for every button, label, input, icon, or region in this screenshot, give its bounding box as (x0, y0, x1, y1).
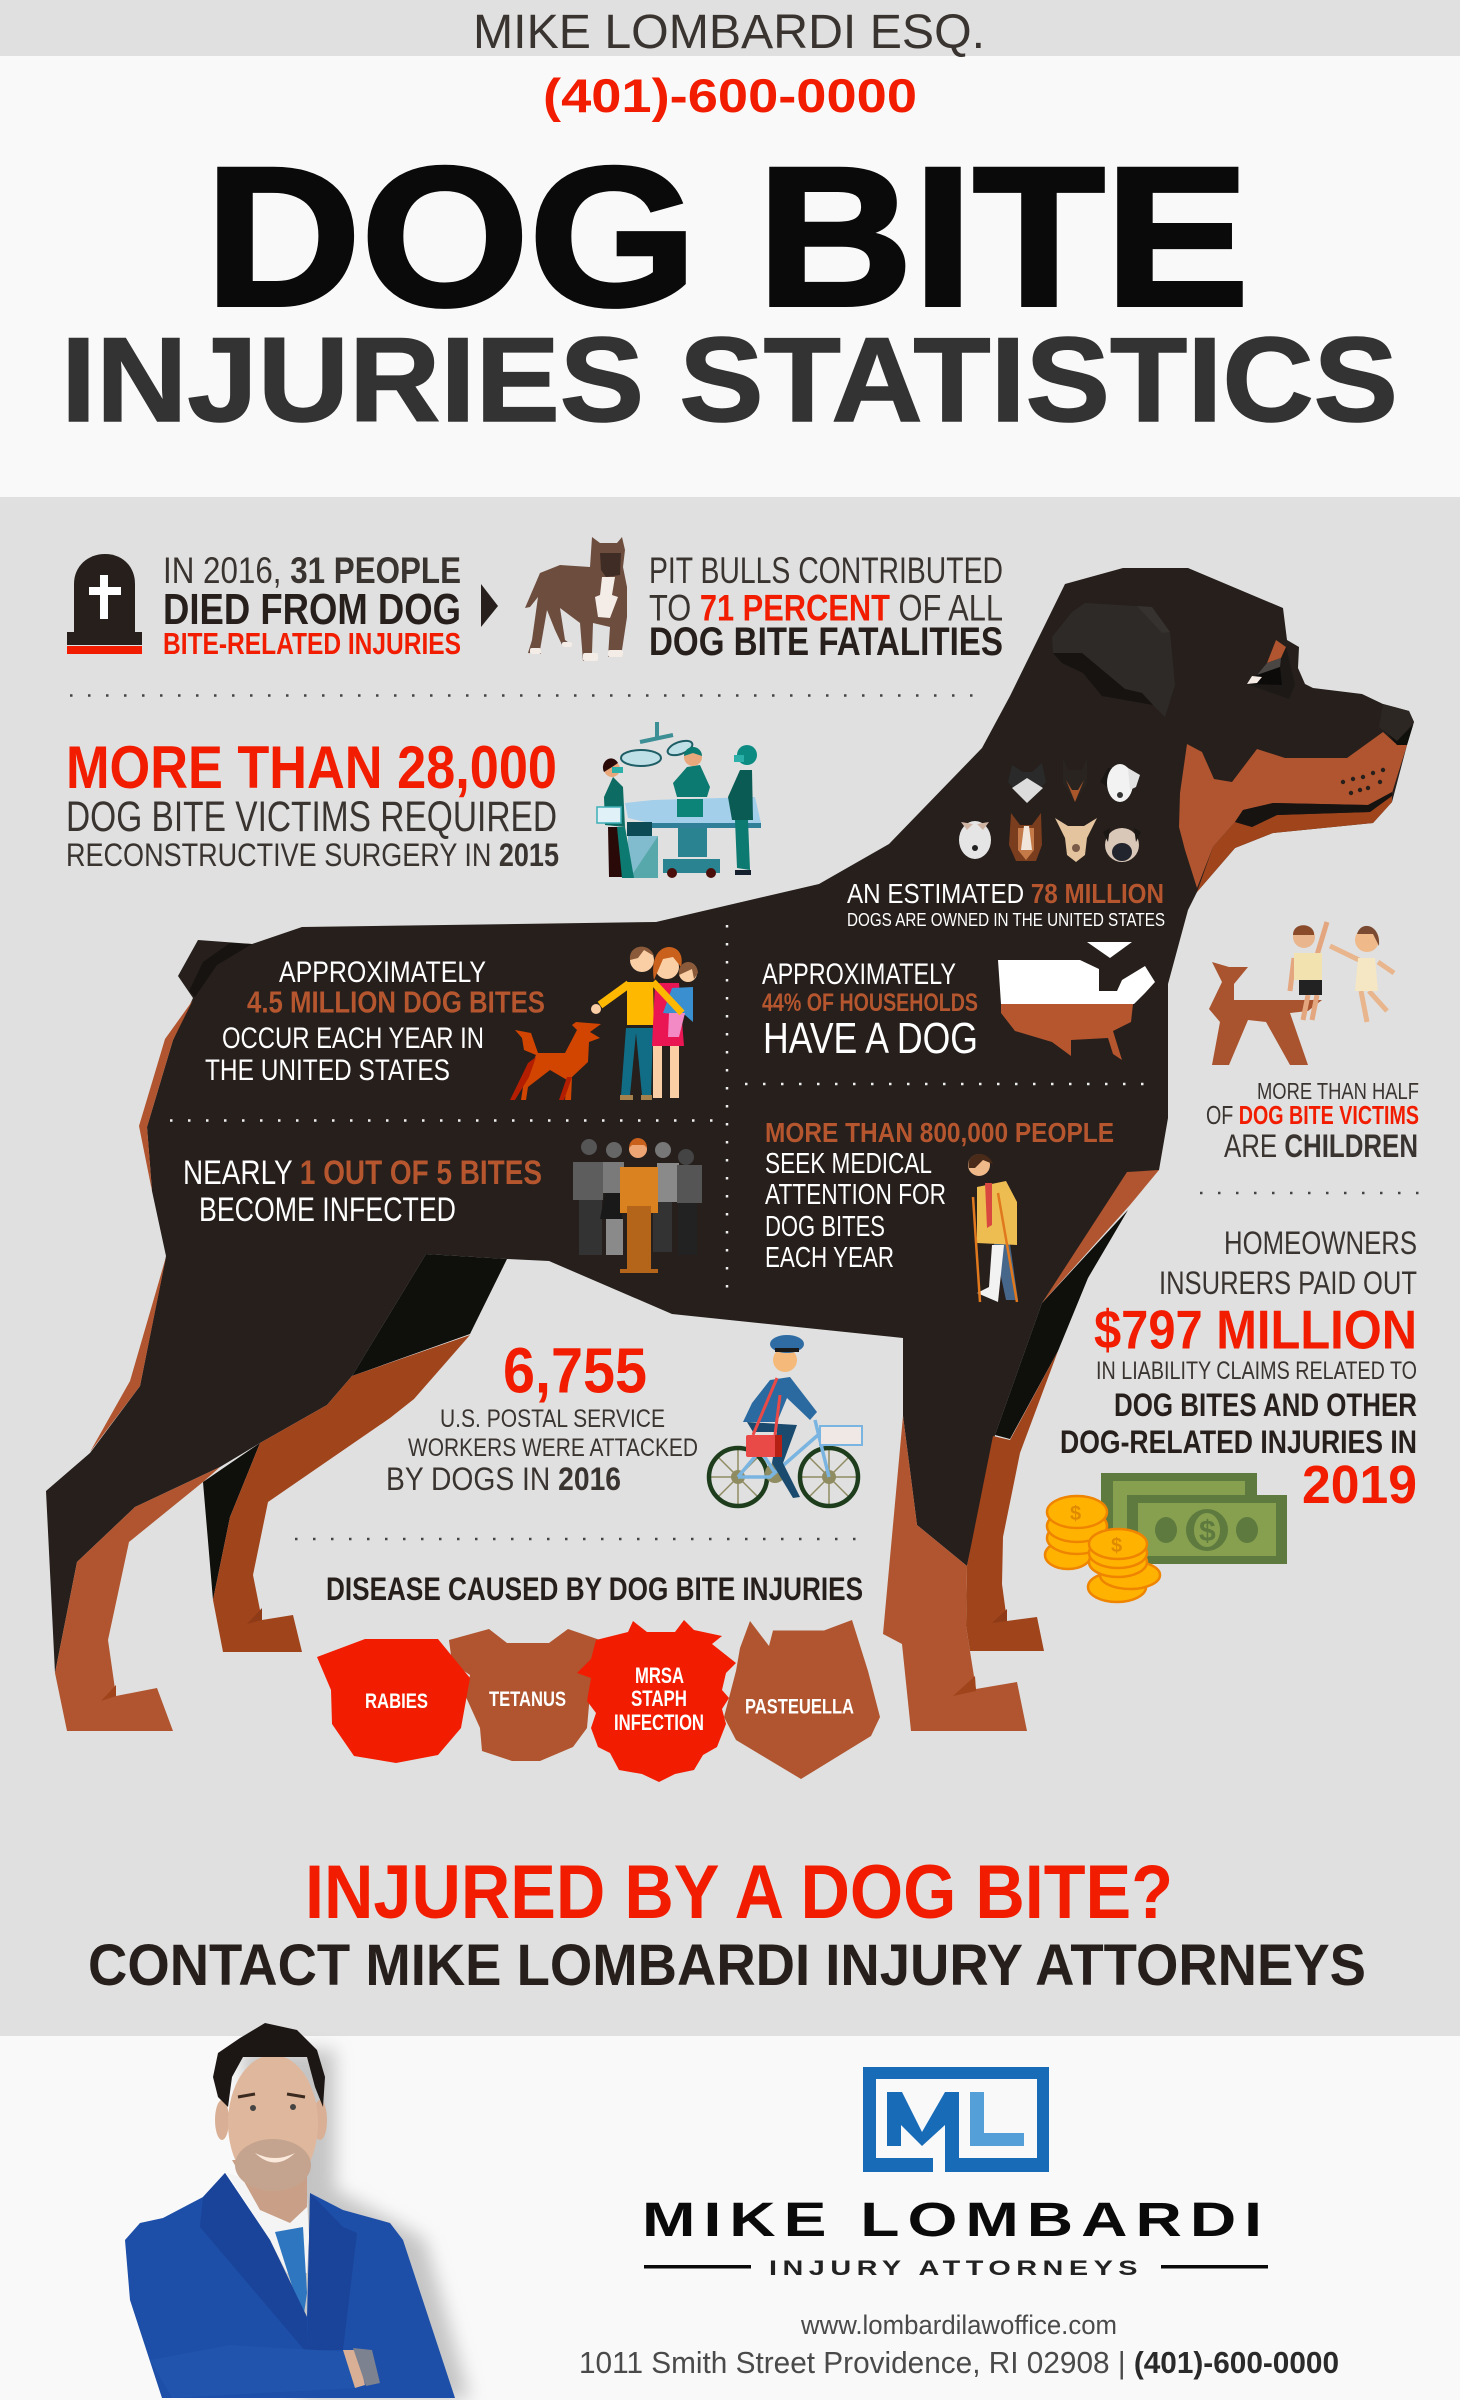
call to action: CONTACT MIKE LOMBARDI INJURY ATTORNEYS (88, 1933, 1366, 1998)
text: homeowners insurers: 2019 (1302, 1455, 1417, 1515)
title: DOG BITE (205, 126, 1249, 347)
text: 78 million dogs: DOGS ARE OWNED IN THE UNITED STATES (847, 910, 1165, 930)
text: half are children: MORE THAN HALF (1257, 1078, 1419, 1104)
text: reconstructive surgery: RECONSTRUCTIVE SURGERY IN 2015 (66, 837, 559, 873)
text: 44% of households: 44% OF HOUSEHOLDS (762, 989, 978, 1017)
icon: money and coins: $ (1199, 1515, 1216, 1548)
text: postal workers: 6,755 (503, 1334, 647, 1406)
disease: MRSA staph infection head: MRSA (635, 1663, 684, 1688)
logo: firm wordmark: MIKE LOMBARDI (642, 2194, 1270, 2247)
icon: muzzle whisker dots (1341, 768, 1385, 795)
disease: tetanus head (449, 1629, 600, 1761)
arrow (481, 584, 498, 627)
text: half are children (1206, 1078, 1419, 1164)
disease: rabies head (317, 1639, 470, 1763)
text: homeowners insurers (1060, 1225, 1417, 1515)
text: postal workers (386, 1334, 698, 1497)
text: homeowners insurers: HOMEOWNERS (1224, 1225, 1417, 1261)
text: 4.5 million dog bites: THE UNITED STATES (205, 1054, 450, 1087)
disease: MRSA staph infection head (577, 1620, 736, 1782)
dotted divider lines (70, 696, 1420, 1539)
icon: man on crutches (968, 1154, 1018, 1302)
text: 1 out of 5 bites: BECOME INFECTED (199, 1191, 456, 1229)
text: 78 million dogs (847, 878, 1165, 930)
text: reconstructive surgery (66, 734, 559, 873)
text: half are children: ARE CHILDREN (1224, 1128, 1418, 1164)
text: 4.5 million dog bites: OCCUR EACH YEAR IN (222, 1022, 484, 1055)
disease: rabies head: RABIES (365, 1690, 428, 1713)
text: homeowners insurers: $797 MILLION (1094, 1298, 1417, 1360)
text: 800,000 people: ATTENTION FOR (765, 1179, 946, 1211)
text: 4.5 million dog bites: 4.5 MILLION DOG BITES (247, 984, 545, 1020)
text: postal workers: BY DOGS IN 2016 (386, 1461, 621, 1497)
text: people died (163, 550, 461, 661)
disease: MRSA staph infection head: INFECTION (614, 1710, 704, 1735)
text: 800,000 people: SEEK MEDICAL (765, 1148, 932, 1180)
icon: money and coins: $ (1111, 1535, 1122, 1557)
title: INJURIES STATISTICS (61, 313, 1398, 447)
attorney portrait (125, 2023, 470, 2399)
footer contact details: 1011 Smith Street Providence, RI 02908 | (401)-600-0000 (579, 2345, 1339, 2380)
call to action (88, 1850, 1366, 1998)
dog silhouette (46, 568, 1414, 1731)
icon: money and coins (1045, 1473, 1287, 1602)
icon: tombstone (67, 554, 142, 654)
text: 4.5 million dog bites: APPROXIMATELY (279, 956, 486, 989)
header: firm name and phone (473, 6, 985, 122)
footer contact details (579, 2310, 1339, 2380)
text: people died: IN 2016, 31 PEOPLE (163, 550, 461, 591)
disease: pasteuella head: PASTEUELLA (745, 1696, 854, 1718)
icon: dog ear (1052, 603, 1175, 717)
title (61, 126, 1398, 447)
icon: dog nose (1379, 704, 1414, 745)
icon: dog eye (1247, 640, 1295, 699)
text: pit bulls: PIT BULLS CONTRIBUTED (649, 550, 1003, 591)
icon: crowd with one highlighted person (573, 1138, 702, 1273)
header: firm name and phone: (401)-600-0000 (543, 69, 917, 122)
icon: US map (998, 942, 1155, 1060)
text: 1 out of 5 bites (183, 1154, 542, 1229)
icon: surgery team (597, 722, 761, 878)
text: 44% of households: HAVE A DOG (763, 1014, 978, 1063)
logo: firm wordmark: INJURY ATTORNEYS (769, 2257, 1143, 2280)
logo: firm wordmark (642, 2194, 1270, 2280)
text: pit bulls (649, 550, 1003, 664)
text: postal workers: WORKERS WERE ATTACKED (408, 1434, 698, 1462)
text: 44% of households (762, 958, 978, 1063)
text: pit bulls: TO 71 PERCENT OF ALL (649, 588, 1003, 628)
icon: postal worker on bicycle (709, 1335, 862, 1506)
text: reconstructive surgery: DOG BITE VICTIMS REQUIRED (66, 793, 557, 841)
text: 1 out of 5 bites: NEARLY 1 OUT OF 5 BITES (183, 1154, 542, 1192)
text: people died: DIED FROM DOG (163, 585, 461, 634)
header: firm name and phone: MIKE LOMBARDI ESQ. (473, 6, 985, 59)
text: reconstructive surgery: MORE THAN 28,000 (66, 734, 557, 801)
disease: MRSA staph infection head: STAPH (631, 1686, 687, 1711)
icon: pit bull (525, 537, 627, 661)
text: 4.5 million dog bites (205, 956, 545, 1087)
text: 800,000 people (765, 1117, 1114, 1274)
icons: dog breed faces (959, 758, 1141, 862)
icon: family threatened by dog (510, 947, 698, 1100)
disease: pasteuella head (724, 1620, 880, 1779)
text: 800,000 people: DOG BITES (765, 1211, 885, 1243)
text: postal workers: U.S. POSTAL SERVICE (440, 1405, 665, 1433)
icon: dog jumping at children (1209, 922, 1394, 1065)
text: 800,000 people: MORE THAN 800,000 PEOPLE (765, 1117, 1114, 1148)
text: pit bulls: DOG BITE FATALITIES (649, 620, 1003, 664)
logo: ML mark (863, 2067, 1049, 2172)
heading: diseases: DISEASE CAUSED BY DOG BITE INJURIES (326, 1571, 863, 1607)
text: people died: BITE-RELATED INJURIES (163, 626, 461, 661)
text: 78 million dogs: AN ESTIMATED 78 MILLION (847, 878, 1164, 909)
icon: money and coins: $ (1070, 1503, 1081, 1525)
text: 44% of households: APPROXIMATELY (762, 958, 956, 991)
text: 800,000 people: EACH YEAR (765, 1242, 894, 1274)
disease: tetanus head: TETANUS (489, 1688, 566, 1711)
call to action: INJURED BY A DOG BITE? (305, 1850, 1173, 1935)
footer contact details: www.lombardilawoffice.com (800, 2310, 1117, 2340)
